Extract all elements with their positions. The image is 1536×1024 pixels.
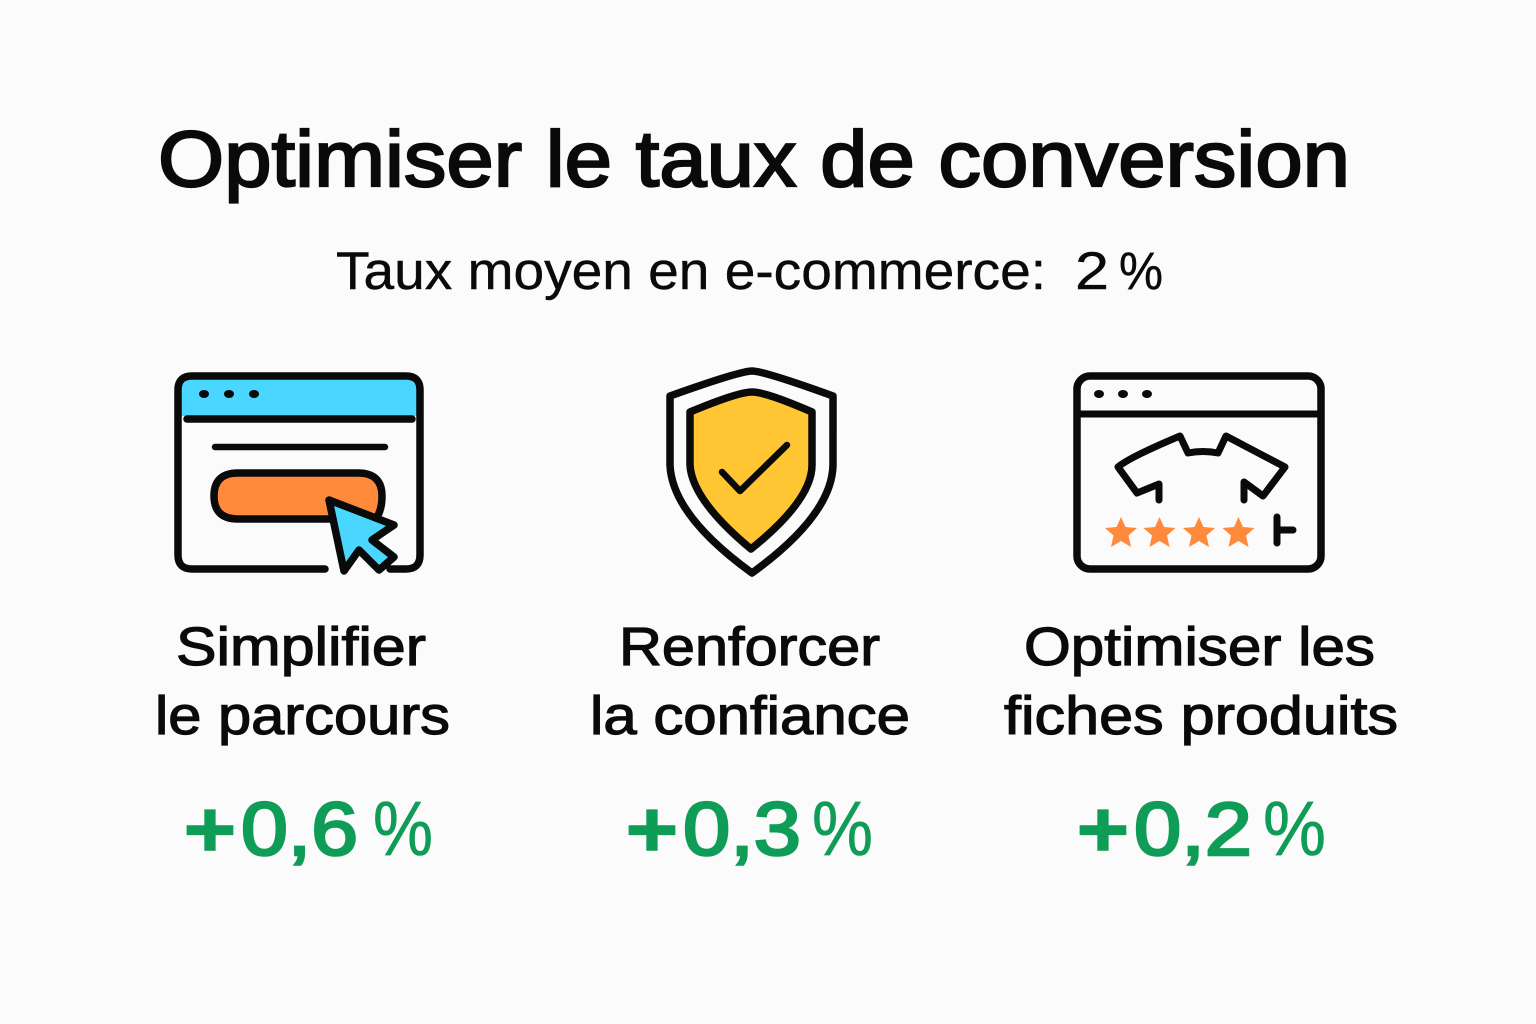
value: +0,2 %: % bbox=[1263, 786, 1326, 872]
label: renforcer la confiance: Renforcer bbox=[619, 617, 880, 677]
value: +0,2 %: + bbox=[1078, 787, 1128, 871]
value: +0,6 %: + bbox=[185, 787, 235, 871]
value: +0,3 %: % bbox=[812, 786, 873, 872]
label: renforcer la confiance bbox=[590, 617, 910, 746]
value: +0,3 %: 0,3 bbox=[683, 787, 801, 871]
label: optimiser les fiches produits: Optimiser les bbox=[1024, 617, 1375, 677]
value: +0,6 %: 0,6 bbox=[241, 787, 358, 871]
label: renforcer la confiance: la confiance bbox=[590, 686, 910, 746]
value: +0,3 %: + bbox=[627, 787, 677, 871]
subtitle: Taux moyen en e-commerce: bbox=[336, 242, 1046, 301]
value: +0,6 % bbox=[185, 786, 433, 872]
label: simplifier le parcours: le parcours bbox=[155, 686, 450, 746]
value: +0,3 % bbox=[627, 786, 873, 872]
value: +0,6 %: % bbox=[373, 786, 433, 872]
value: +0,2 % bbox=[1078, 786, 1326, 872]
value: +0,2 %: 0,2 bbox=[1134, 787, 1252, 871]
subtitle: 2 bbox=[1075, 242, 1109, 301]
label: optimiser les fiches produits bbox=[1004, 617, 1398, 746]
subtitle: % bbox=[1119, 242, 1163, 301]
label: optimiser les fiches produits: fiches produits bbox=[1004, 686, 1398, 746]
icon: shield with checkmark bbox=[670, 371, 833, 573]
label: simplifier le parcours: Simplifier bbox=[176, 617, 426, 677]
title: Optimiser le taux de conversion bbox=[158, 114, 1350, 203]
icon: browser with button and cursor bbox=[178, 376, 420, 571]
label: simplifier le parcours bbox=[155, 617, 450, 746]
icon: product page with t-shirt and stars bbox=[1077, 376, 1321, 569]
